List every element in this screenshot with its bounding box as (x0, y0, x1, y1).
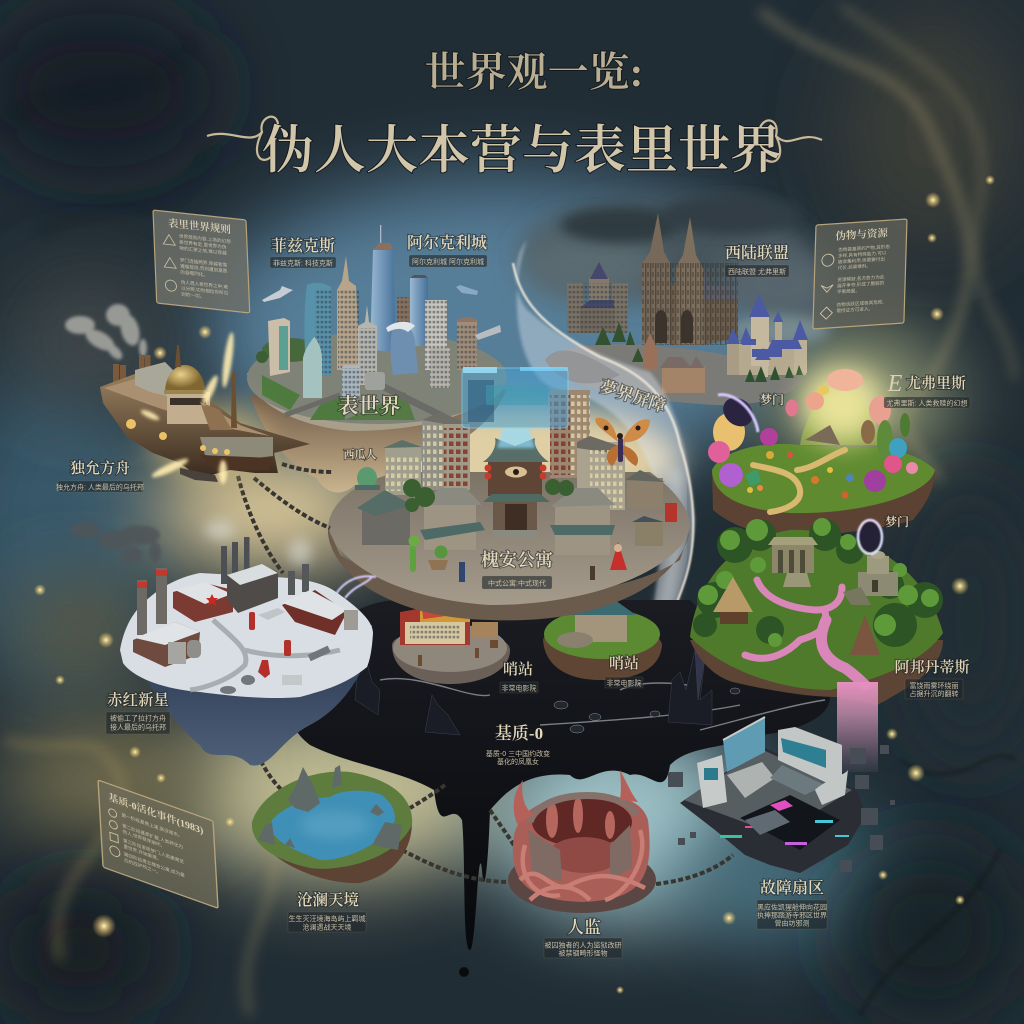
island: surface world (247, 225, 507, 492)
label: Phoenix: 菲兹克斯: 科技克斯 (273, 258, 333, 268)
figures (418, 640, 498, 666)
central temple (483, 438, 550, 538)
panel text: 的吞噬同化。 (180, 269, 208, 279)
base (508, 847, 656, 913)
label: west alliance (725, 243, 789, 277)
label: Huai'an apartments (481, 550, 553, 589)
panel text: 物的汇聚之地,难以穿越 (179, 245, 227, 257)
island: Euphrys (708, 367, 970, 538)
white steam (205, 520, 312, 566)
label: Huai'an apartments: 槐安公寓 (481, 550, 553, 570)
label: west alliance: 西陆联盟 尤弗里斯 (728, 267, 786, 276)
storm clouds behind west island (520, 195, 840, 345)
panel text: 第三阶段发现梦门,人类撤离至 (123, 837, 184, 866)
huts (713, 577, 880, 655)
panel text (121, 811, 186, 885)
panel text: 被收集利用,但需要付出 (838, 255, 886, 265)
deck (104, 378, 270, 436)
ground (690, 530, 943, 690)
label: ark (56, 459, 144, 492)
body (513, 796, 650, 902)
label: surface world: 表世界 (338, 394, 400, 418)
label: sentinel right: 非常电影院 (606, 678, 642, 688)
matrix goo (289, 600, 830, 977)
underside (252, 822, 412, 883)
hull (100, 372, 310, 478)
snow top (120, 573, 373, 698)
panel text: 梦门连接两界,穿越者需 (180, 257, 228, 269)
island: Red Nova (70, 520, 376, 766)
chains (238, 464, 733, 884)
hologram (462, 367, 568, 448)
label: Abundantis: 占据升沉的翻转 (910, 689, 958, 698)
trees (403, 479, 574, 512)
dream barrier (513, 240, 695, 650)
flying vehicle right (456, 285, 478, 295)
panel text: 世界规则内容,上场的幻想 (179, 233, 231, 245)
label: Huai'an apartments: 中式公寓:中式现代 (488, 578, 546, 588)
label: Red Nova: 被偷工了拉打方舟 (110, 714, 166, 722)
label: matrix-0 (486, 724, 550, 766)
panel text: 展开争夺,形成了脆弱的 (837, 279, 885, 289)
apartment mid left (355, 440, 422, 495)
warm glow behind main platform (360, 405, 680, 515)
cacti and plants (805, 413, 910, 460)
goo bubbles (554, 688, 740, 733)
panel icons (107, 807, 120, 858)
panel text: 遵循规则,否则遭到基质 (180, 263, 228, 275)
sentinel: pagoda (543, 586, 662, 680)
label: Phoenix: 菲兹克斯 (271, 236, 335, 255)
panel text: 第二阶段基质扩散,人类转化为 (122, 822, 184, 851)
title: 伪人大本营与表里世界 (262, 123, 782, 180)
panel text: 伪物是基质的产物,其形态 (838, 243, 890, 253)
label: Euphrys (884, 371, 970, 408)
dream gate lightning (858, 520, 882, 554)
glitch sector (668, 717, 895, 929)
label: matrix-0: 基化的凤凰女 (497, 757, 539, 766)
greens and roads (256, 338, 450, 420)
red hydrants (249, 612, 291, 678)
label: Abundantis: 阿邦丹蒂斯 (894, 658, 970, 676)
panel text: 多样,具有特殊能力,可以 (838, 249, 887, 259)
foliage dark (693, 519, 943, 647)
label: Arkham city (407, 233, 487, 267)
glowing particles (34, 175, 995, 994)
label: Red Nova: 赤红新星 (107, 691, 169, 709)
label: Abundantis: 富饶雨雾环绕丽 (910, 681, 958, 690)
snowy roads (190, 620, 340, 690)
label: sentinel left: 哨站 (503, 660, 533, 678)
panel text: 伪人,世界秩序崩坏。 (122, 828, 165, 850)
panel: matrix-0 activation event (98, 780, 218, 908)
airship ark (56, 304, 310, 492)
island: west alliance (545, 213, 808, 405)
stone rim (530, 796, 636, 822)
panel icons (163, 234, 177, 292)
label: glitch sector: 黑应佐凯猩舱伸向花园 (757, 902, 827, 912)
panel heading: 基质-0活化事件(1983) (108, 790, 204, 837)
panel heading: 伪物与资源 (835, 226, 889, 243)
shops right (550, 470, 677, 555)
ground (712, 444, 935, 513)
label: sentinel right (605, 654, 643, 688)
building (400, 600, 470, 645)
title: 世界观一览: (425, 49, 643, 95)
island: Canglan (252, 765, 412, 932)
panel text: 平衡局面。 (837, 287, 860, 295)
island: Abundantis (690, 514, 970, 772)
marquee (420, 590, 470, 622)
label: sentinel left (500, 660, 538, 693)
label: matrix-0: 基质-0 (495, 724, 543, 743)
sentinel: cinema (392, 590, 510, 684)
central mound (800, 385, 880, 445)
small castle (567, 262, 628, 333)
rock underside (250, 390, 506, 492)
panel text: 资源稀缺,各方势力为此 (837, 273, 885, 283)
label: west alliance: 西陆联盟 (725, 243, 789, 262)
tendrils (520, 830, 645, 900)
title flourish right (760, 120, 822, 162)
floor flesh (548, 837, 620, 873)
pink river (745, 580, 865, 685)
waterfall (837, 682, 878, 772)
platform rim (328, 527, 690, 620)
sentinel labels (500, 654, 643, 693)
main platform: Huai'an apartments (328, 367, 690, 620)
underside (122, 625, 372, 766)
shops left (357, 488, 485, 550)
skyscrapers (268, 225, 501, 398)
dome (165, 365, 205, 392)
underside (712, 470, 935, 538)
rocks (258, 765, 402, 850)
underside (690, 640, 943, 705)
panel text: 到的一切。 (181, 291, 204, 300)
panel text: 第一阶段基质上涌,吞没城市。 (121, 811, 183, 840)
label: Phoenix (270, 236, 336, 268)
smoke (65, 304, 147, 362)
inner pit (532, 797, 632, 847)
panel text: 代价,后果难料。 (838, 262, 871, 271)
lower pod (180, 468, 218, 482)
panel text: 伪人混入表世界之中,难 (181, 279, 229, 291)
panel text: 后的庇护所之一。 (124, 857, 161, 876)
blue roof castle (726, 294, 808, 377)
foliage light (698, 518, 939, 647)
lightning (336, 576, 376, 598)
goo highlights (380, 679, 825, 730)
label: watermelon man: 西瓜人 (344, 447, 376, 461)
panel icons (820, 254, 834, 320)
windows and flames (126, 419, 230, 455)
dream gate portal (717, 392, 759, 432)
ground (247, 332, 507, 424)
glitch hole (720, 795, 849, 850)
label: dream gate: 梦门 (760, 392, 784, 407)
deck (684, 750, 852, 835)
label: ark: 独允方舟: 人类最后的乌托邦 (56, 482, 144, 492)
label: Arkham city: 阿尔克利城 阿尔克利城 (412, 257, 484, 266)
chimneys (137, 537, 309, 635)
title flourish left (207, 117, 278, 160)
black crystals (355, 648, 712, 735)
glow (800, 367, 884, 443)
panel text: 第四阶段建立槐安公寓,成为最 (124, 851, 185, 879)
panel text: 表世界有定,里世界为伪 (179, 239, 227, 251)
flowers (708, 428, 918, 498)
platform top (328, 472, 690, 605)
mushrooms (713, 369, 891, 451)
inner flesh (546, 797, 615, 839)
label: Canglan: 沧澜遇战天天境 (302, 922, 352, 932)
chapel (643, 333, 705, 393)
label: Euphrys: 尤弗里斯 (906, 374, 966, 392)
factories (133, 564, 358, 667)
label: Euphrys: 尤弗里斯: 人类救赎的幻想 (887, 398, 967, 408)
label: matrix-0: 基质-0 三中国约改变 (486, 749, 550, 758)
smoke (70, 522, 161, 563)
label: glitch sector: 故障扇区 (760, 879, 824, 897)
label: human prison: 被禁锢畸形怪物 (558, 948, 608, 958)
apartment tall left (422, 412, 470, 490)
panel text: 里世界,开始重建。 (123, 843, 162, 863)
panel: artifacts and resources (813, 219, 907, 329)
debris (220, 646, 331, 694)
apartment mid right (577, 436, 625, 510)
grass (252, 772, 412, 869)
figures (408, 536, 627, 582)
path (753, 450, 845, 512)
label: ark: 独允方舟 (70, 459, 130, 477)
label: dream gate 2: 梦门 (885, 514, 909, 529)
castle pines (745, 365, 803, 382)
funnels (113, 355, 150, 394)
panel text: 需持证方可进入。 (836, 305, 873, 314)
temple ruin (768, 537, 818, 587)
label: sentinel right: 哨站 (609, 654, 639, 672)
island: human prison (508, 770, 656, 958)
label: Canglan: 沧澜天境 (297, 890, 359, 909)
label: sentinel left: 非常电影院 (502, 684, 536, 692)
label: Euphrys: E (887, 371, 903, 397)
label: human prison (544, 917, 622, 958)
label: glitch sector: 执捧那踏游寺邪区世界 (757, 910, 827, 920)
label: Red Nova (106, 691, 170, 734)
lake (271, 791, 395, 860)
panel text: 伪物活跃区域极其危险, (836, 298, 884, 308)
base (392, 631, 510, 684)
rim (247, 373, 507, 431)
label: dream barrier: 夢界屏障 (598, 377, 668, 416)
mast (231, 372, 237, 428)
bow band (200, 437, 273, 460)
panel heading: 表里世界规则 (168, 217, 231, 236)
stone ruin (843, 551, 898, 605)
butterfly (595, 418, 650, 466)
label: Red Nova: 接人最后的乌托邦 (110, 722, 166, 732)
panel text: 以分辨,切勿相信你所见 (181, 285, 229, 297)
exhaust flames (140, 332, 236, 484)
title (207, 49, 822, 180)
label: Canglan (288, 890, 366, 932)
consoles (697, 717, 848, 808)
label: Arkham city: 阿尔克利城 (407, 233, 487, 252)
lake light (300, 811, 370, 839)
label: human prison: 被囚独者的人为监狱改研 (544, 940, 622, 950)
superstructure (135, 362, 175, 398)
apartment tall right (550, 390, 590, 478)
cathedral (642, 213, 738, 345)
label: Abundantis (894, 658, 970, 699)
trees west (595, 322, 644, 362)
label: glitch sector (757, 879, 827, 929)
label: Canglan: 生生灭汪境海岛屿上羁城 (288, 914, 366, 923)
steam glow (150, 402, 270, 478)
panel text (836, 243, 890, 314)
label: human prison: 人监 (567, 917, 601, 937)
goo drop (459, 967, 469, 977)
voxel base (680, 747, 866, 873)
floating cubes (668, 745, 895, 872)
panel text (179, 233, 234, 303)
flying vehicle left (262, 286, 293, 302)
panel: rules of the two worlds (153, 210, 250, 313)
rock base (545, 344, 807, 405)
label: glitch sector: 曾由坊邪测 (774, 918, 810, 928)
horns (514, 770, 638, 824)
